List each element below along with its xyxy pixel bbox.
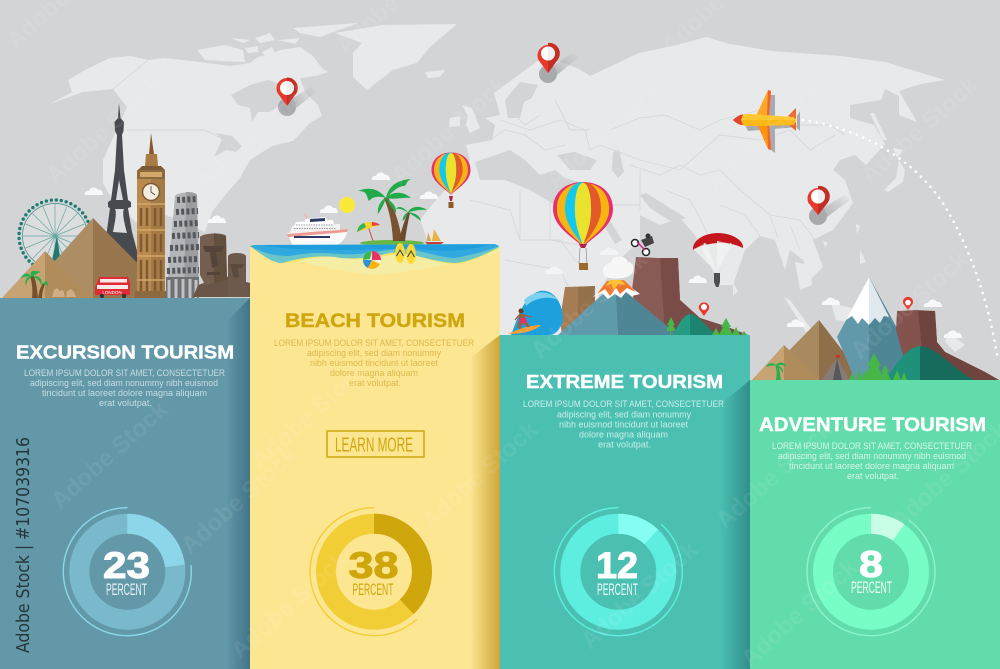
icon: motorbike rider [632,234,654,256]
watermarks: Adobe Stock [386,71,514,189]
icon: trees [666,317,747,335]
donut chart: 23 percent: 23 [103,545,150,586]
map: British Isles [449,105,480,133]
donut chart: 12 percent: 12 [596,545,638,586]
icon: Big Ben [135,133,167,298]
watermarks: Adobe Stock [541,76,669,194]
donut chart: 12 percent: PERCENT [597,581,638,599]
text block: beach tourism: erat volutpat. [349,378,401,388]
icon: sailing boat [425,229,444,245]
landmarks: excursion tourism [2,103,250,298]
icon: large hot air balloon [553,182,613,270]
icon: Moai statues [193,233,250,297]
watermarks: Adobe Stock [856,71,984,189]
text block: beach tourism: nibh euismod tincidunt ut laoreet [310,358,438,368]
icon: cloud [787,319,805,327]
map: Eurasia and Africa [420,37,945,335]
watermarks: Adobe Stock [736,554,864,669]
heading: beach tourism: BEACH TOURISM [285,310,465,332]
icon: palm tree [766,362,786,380]
icon: flip flops [395,243,416,264]
text block: beach tourism: LOREM IPSUM DOLOR SIT AMET, CONSECTETUER [274,338,474,348]
watermarks: Adobe Stock [701,76,829,194]
text block: excursion tourism: adipiscing elit, sed diam nonummy nibh euismod [30,378,218,388]
map: Greenland and Iceland [335,24,457,90]
map: Hudson Bay and Great Lakes [214,80,287,157]
icon: surfer [508,308,541,334]
watermarks: Adobe Stock [526,246,654,364]
text block: adventure tourism: tincidunt ut laoreet dolore magna aliquam [789,461,954,471]
watermarks: Adobe Stock [41,71,169,189]
text block: excursion tourism: LOREM IPSUM DOLOR SIT AMET, CONSECTETUER [24,368,225,378]
icon: green hill [886,346,974,380]
icon: airplane [733,90,800,153]
icon: cloud [372,172,390,180]
panel: extreme tourism [500,335,750,669]
watermarks: Adobe Stock [191,76,319,194]
icon: tent [822,355,850,380]
watermarks: Adobe Stock [846,246,974,364]
panel: adventure tourism [750,380,1000,669]
heading: extreme tourism: EXTREME TOURISM [526,371,723,392]
text block: beach tourism: adipiscing elit, sed diam nonummy [307,348,441,358]
text block: extreme tourism: dolore magna aliquam [579,430,668,440]
icon: big pyramid [22,218,172,298]
heading: excursion tourism: EXCURSION TOURISM [16,342,234,362]
map: South-East Asia islands [733,113,965,352]
map: North America [50,47,328,232]
donut chart: 8 percent: PERCENT [851,579,892,597]
text block: adventure tourism: LOREM IPSUM DOLOR SIT AMET, CONSECTETUER [772,441,972,451]
heading: adventure tourism: ADVENTURE TOURISM [759,414,986,436]
text block: extreme tourism: adipiscing elit, sed diam nonummy [557,410,691,420]
text block: beach tourism: dolore magna aliquam [330,368,418,378]
text block: excursion tourism [24,368,225,408]
icon: cloud [600,247,618,255]
map: country borders [113,60,845,290]
icon: small map pin [903,297,913,310]
text block: excursion tourism: erat volutpat. [99,398,152,408]
donut chart: 38 percent: PERCENT [352,581,394,599]
icon: brown rock [560,286,595,336]
icon: cloud [320,205,338,213]
icon: cloud [85,187,103,195]
text block: adventure tourism [772,441,972,481]
world map dotted flight path [803,120,998,360]
icon: cloud [944,330,962,338]
icon: small pyramid [752,345,819,380]
icon: Leaning Tower of Pisa [166,192,199,298]
icon: volcano smoke [603,256,634,279]
icon: beach umbrella [357,222,380,241]
donut chart: 38 percent: 38 [348,545,398,586]
icon: palm tree [20,271,48,298]
donut chart: 12 percent [528,481,709,662]
text block: adventure tourism: erat volutpat. [847,471,899,481]
icon: cruise ship [287,213,348,246]
landmarks: adventure tourism [752,277,999,381]
text block: adventure tourism: adipiscing elit, sed diam nonummy nibh euismod [778,451,966,461]
panel: excursion tourism [0,298,250,669]
icon: cloud [689,275,707,283]
text block: extreme tourism [523,399,724,450]
icon: cloud [924,299,942,307]
text block: extreme tourism: erat volutpat. [598,440,651,450]
donut chart: 23 percent: PERCENT [106,581,147,599]
icon: cloud [208,215,226,223]
watermark text: stock id: Adobe Stock | #107039316 [13,437,34,653]
watermarks: Adobe Stock [46,396,174,514]
map: inland seas [475,82,686,244]
text block: excursion tourism: tincidunt ut laoreet dolore magna aliquam [42,388,207,398]
icon: sea and sand [250,244,500,275]
icon: big pyramid [760,320,866,381]
donut chart: 23 percent [57,501,198,642]
world map [50,23,965,352]
icon: sun [339,197,355,213]
icon: cloud [545,266,563,274]
text block: beach tourism [274,338,474,388]
icon: snow mountain [837,277,920,380]
watermarks: Adobe Stock [576,536,704,654]
icon: pine trees [849,353,907,380]
watermarks: Adobe Stock [176,441,304,559]
icon: beach ball [363,251,381,269]
icon: London bus [95,277,130,298]
icon: parachute [693,233,743,287]
icon: camels [52,288,76,297]
icon: ferris wheel [19,200,91,272]
icon: Eiffel Tower [98,103,140,285]
icon: small hot air balloon [432,152,470,208]
donut chart: 8 percent: 8 [859,544,883,585]
map: Canadian Arctic islands [197,23,358,62]
panel: beach tourism [250,243,500,669]
icon: volcano [558,280,678,335]
icon: wave [511,291,563,335]
icon: small pyramid [2,251,91,298]
map pin: China [808,186,850,225]
donut chart: 8 percent [782,482,960,661]
landmarks: extreme tourism [508,182,748,336]
watermarks: Adobe Stock [416,416,544,534]
icon: island with palm trees [358,179,427,246]
watermarks: Adobe Stock [711,416,839,534]
icon: large red rock [632,257,748,335]
button: learn more: LEARN MORE [335,434,413,456]
watermarks: Adobe Stock [226,546,354,664]
map pin: Northern Europe [538,43,578,83]
icon: small map pin [699,302,709,316]
icon: red rock [896,310,999,380]
icon: London bus: LONDON [102,290,122,295]
button: learn more [327,431,424,457]
icon: green hill [673,314,716,335]
text block: extreme tourism: nibh euismod tincidunt ut laoreet [559,420,688,430]
donut chart: 38 percent [284,481,464,662]
icon: cloud [822,297,840,305]
map pin: North America [276,77,316,116]
watermarks: Adobe Stock [246,356,374,474]
icon: cloud [420,191,438,199]
text block: extreme tourism: LOREM IPSUM DOLOR SIT AMET, CONSECTETUER [523,399,724,409]
